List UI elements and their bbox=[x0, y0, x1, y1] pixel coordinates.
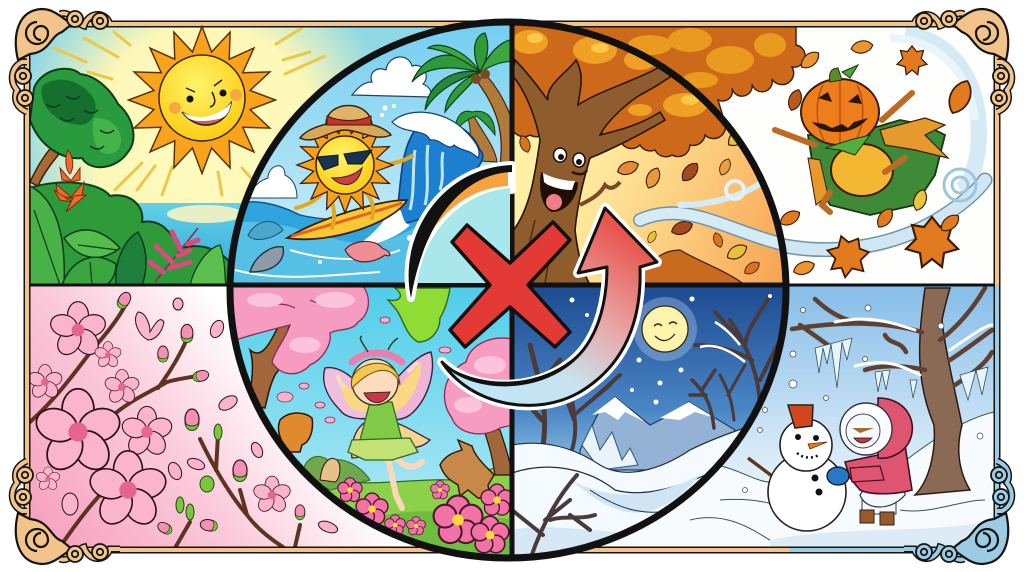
corner scroll top left bbox=[12, 9, 120, 112]
child in pink coat bbox=[827, 398, 912, 525]
falling leaves bbox=[517, 124, 762, 277]
quadrant: autumn bbox=[512, 18, 805, 285]
buds bbox=[185, 409, 199, 430]
cherry tree right bbox=[480, 420, 512, 475]
meadow bbox=[225, 462, 512, 565]
snowflakes bbox=[742, 305, 983, 492]
flying leaves bbox=[777, 39, 976, 284]
panel: winter landscape bbox=[600, 286, 994, 546]
tree face bbox=[540, 148, 587, 212]
blossoms bbox=[50, 301, 106, 356]
pale centre disc bbox=[417, 188, 510, 285]
wind bbox=[640, 156, 800, 248]
pumpkin character bbox=[775, 65, 948, 215]
tree trunk with branches bbox=[512, 50, 700, 285]
butterfly bbox=[136, 312, 164, 340]
wind at top right bbox=[905, 33, 979, 190]
jungle foliage bbox=[30, 182, 245, 285]
snow ground bbox=[600, 412, 994, 547]
deer rabbit bbox=[440, 440, 494, 498]
distant bushes bbox=[302, 456, 370, 490]
icon: smiling summer sun bbox=[128, 26, 276, 173]
fallen branch bbox=[512, 475, 595, 560]
cross lines of quadrants bbox=[30, 284, 994, 286]
fairy bbox=[324, 336, 432, 508]
canopy outer bbox=[580, 28, 806, 116]
green sprite bbox=[388, 288, 450, 342]
clouds bbox=[352, 57, 431, 97]
panel: spring landscape bbox=[30, 286, 376, 546]
arrow: red to blue cycle arrow bbox=[442, 208, 657, 405]
wind stream bbox=[784, 168, 992, 258]
sun rays bbox=[54, 28, 325, 195]
sea bbox=[138, 203, 242, 260]
quadrant: spring bbox=[225, 285, 513, 565]
pink fern bbox=[155, 228, 198, 282]
squid bbox=[345, 241, 390, 262]
dolphin bbox=[248, 222, 283, 239]
snow field back bbox=[512, 415, 794, 565]
ground leaves bbox=[635, 250, 745, 285]
wave bbox=[395, 122, 483, 225]
corner scroll bottom left bbox=[12, 461, 120, 564]
tree crown bbox=[30, 69, 133, 167]
flowers bbox=[356, 493, 388, 524]
dog bbox=[278, 413, 313, 452]
spray bbox=[318, 104, 413, 264]
moon bbox=[633, 297, 697, 361]
canopy bbox=[512, 18, 805, 157]
bare tree bbox=[915, 288, 970, 495]
branches bbox=[30, 302, 300, 548]
mountains bbox=[580, 397, 735, 470]
palm tree bbox=[412, 33, 515, 165]
corner scroll bottom right bbox=[904, 461, 1012, 564]
petals bbox=[62, 298, 339, 535]
corner scroll top right bbox=[904, 9, 1012, 112]
distant pines bbox=[582, 425, 638, 470]
icicles bbox=[815, 338, 988, 400]
snowflakes bbox=[570, 294, 772, 404]
quadrant: summer bbox=[225, 18, 515, 285]
shark bbox=[250, 247, 283, 272]
sun surfer bbox=[296, 105, 412, 228]
small rabbits bbox=[320, 458, 340, 482]
cherry blossom crown left bbox=[225, 285, 368, 374]
sea bbox=[242, 201, 419, 243]
snowman bbox=[748, 405, 846, 531]
snow drifts bbox=[512, 462, 730, 493]
cherry tree left bbox=[247, 312, 318, 408]
surfboard bbox=[287, 200, 407, 239]
panel: summer landscape bbox=[30, 28, 436, 284]
tree trunk bbox=[30, 148, 60, 186]
petals bbox=[277, 317, 451, 423]
bare trees bbox=[520, 295, 785, 475]
panel: autumn landscape bbox=[580, 28, 992, 279]
red heliconia bbox=[54, 150, 86, 212]
icon: red X bbox=[450, 222, 570, 347]
quadrant: winter bbox=[512, 285, 794, 565]
arrow: orange cycle arc bbox=[409, 165, 512, 298]
panel: central wheel bbox=[225, 18, 805, 565]
wheel outline bbox=[230, 22, 786, 558]
